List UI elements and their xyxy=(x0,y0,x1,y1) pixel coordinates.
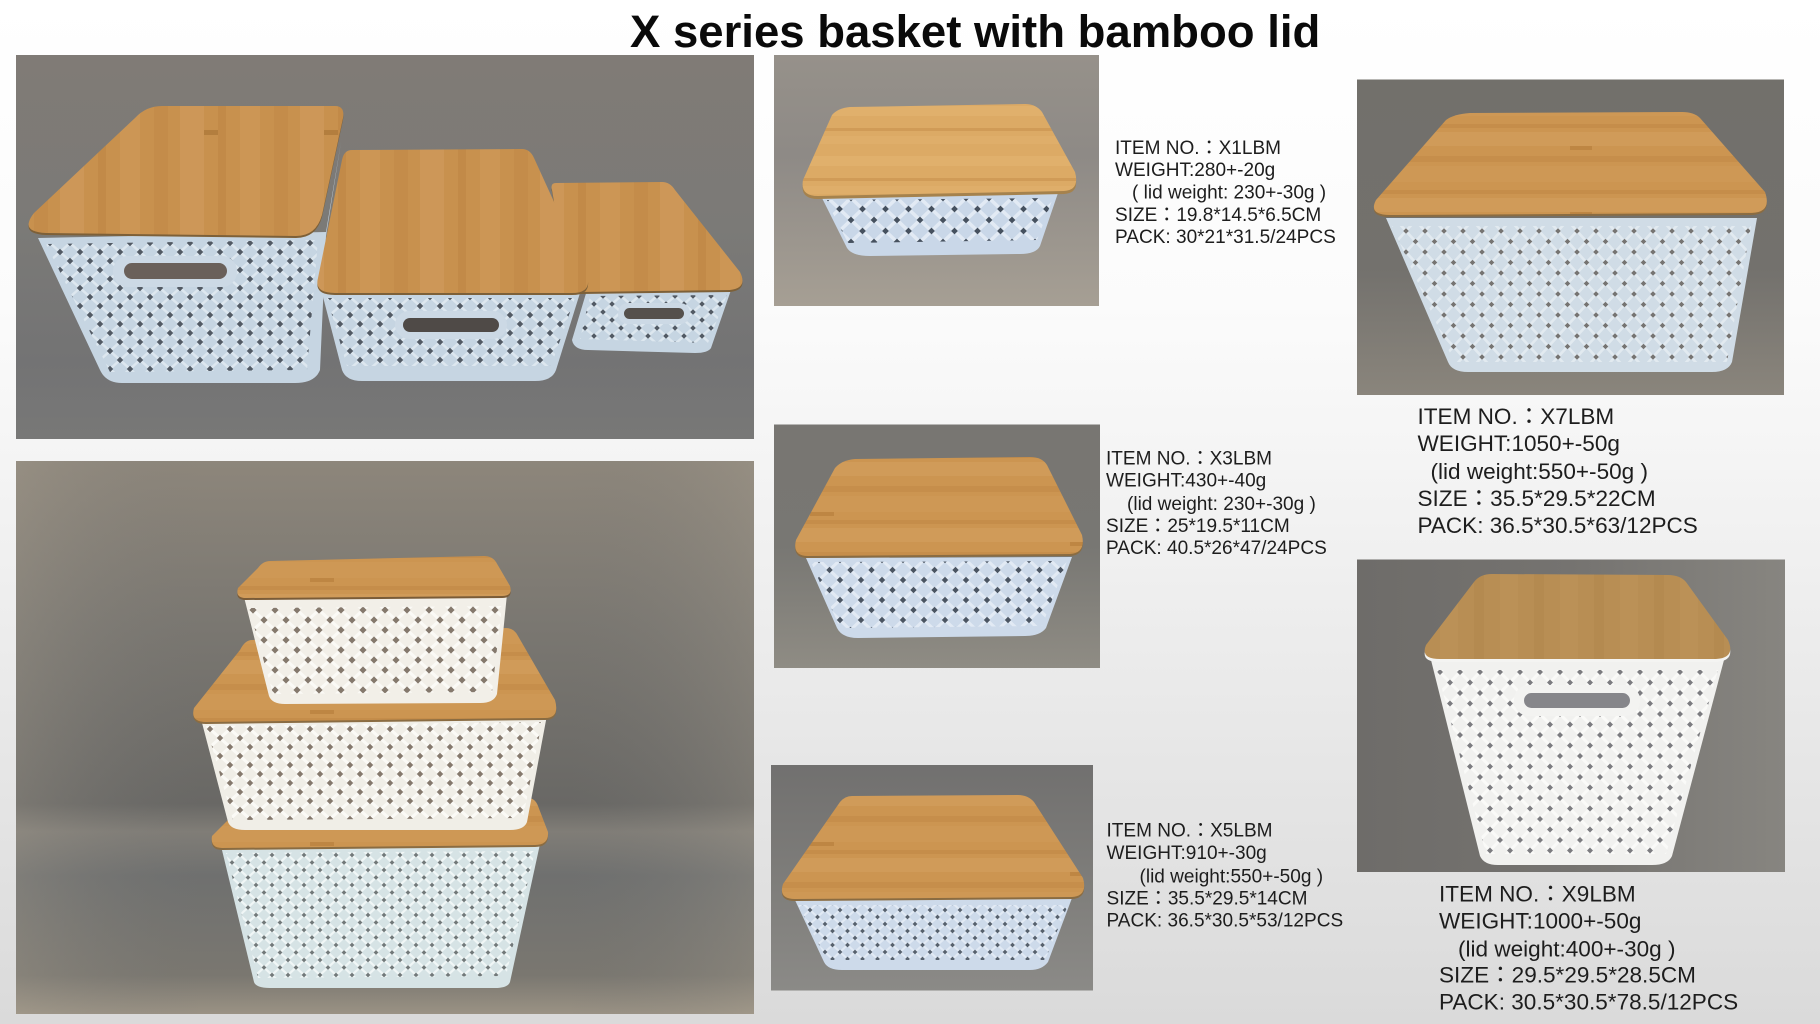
photo: X3LBM basket xyxy=(774,424,1100,668)
spec text: X9LBM: WEIGHT:1000+-50g xyxy=(1439,908,1641,934)
spec text: X3LBM: WEIGHT:430+-40g xyxy=(1106,470,1266,492)
spec text: X9LBM: SIZE：29.5*29.5*28.5CM xyxy=(1439,962,1696,988)
spec text: X7LBM xyxy=(1418,404,1698,538)
spec text: X7LBM: PACK: 36.5*30.5*63/12PCS xyxy=(1418,513,1698,538)
spec text: X9LBM: (lid weight:400+-30g ) xyxy=(1458,936,1675,962)
spec text: X5LBM: WEIGHT:910+-30g xyxy=(1106,843,1267,864)
photo: X5LBM basket xyxy=(771,765,1093,990)
spec text: X1LBM xyxy=(1115,138,1336,248)
spec text: X7LBM: ITEM NO.：X7LBM xyxy=(1418,404,1614,429)
spec text: X5LBM xyxy=(1106,820,1343,932)
spec text: X7LBM: WEIGHT:1050+-50g xyxy=(1418,431,1620,456)
spec text: X1LBM: PACK: 30*21*31.5/24PCS xyxy=(1115,227,1336,248)
spec text: X5LBM: PACK: 36.5*30.5*53/12PCS xyxy=(1106,910,1343,932)
spec text: X7LBM: (lid weight:550+-50g ) xyxy=(1430,459,1648,484)
photo: X9LBM basket xyxy=(1357,560,1785,872)
bottom stacked basket xyxy=(212,798,548,988)
spec text: X1LBM: ( lid weight: 230+-30g ) xyxy=(1132,182,1326,204)
middle stacked basket xyxy=(193,628,556,830)
title: X series basket with bamboo lid xyxy=(630,6,1320,57)
spec text: X1LBM: WEIGHT:280+-20g xyxy=(1115,160,1275,181)
spec text: X9LBM: PACK: 30.5*30.5*78.5/12PCS xyxy=(1439,990,1738,1014)
spec text: X3LBM: (lid weight: 230+-30g ) xyxy=(1127,494,1316,515)
small basket xyxy=(552,182,742,353)
spec text: X9LBM xyxy=(1439,882,1738,1014)
photo: three baskets side by side xyxy=(16,55,754,439)
photo: X1LBM basket xyxy=(774,55,1099,306)
top stacked basket xyxy=(237,556,511,704)
spec text: X3LBM: ITEM NO.：X3LBM xyxy=(1106,448,1272,470)
spec text: X5LBM: (lid weight:550+-50g ) xyxy=(1140,866,1323,888)
spec text: X5LBM: SIZE：35.5*29.5*14CM xyxy=(1106,888,1308,910)
spec text: X3LBM: SIZE：25*19.5*11CM xyxy=(1106,516,1290,537)
spec text: X3LBM: PACK: 40.5*26*47/24PCS xyxy=(1106,538,1327,559)
large basket xyxy=(29,106,343,383)
spec text: X7LBM: SIZE：35.5*29.5*22CM xyxy=(1418,486,1656,511)
spec text: X9LBM: ITEM NO.：X9LBM xyxy=(1439,882,1636,906)
spec text: X1LBM: ITEM NO.：X1LBM xyxy=(1115,138,1281,159)
medium basket xyxy=(317,149,588,381)
spec text: X5LBM: ITEM NO.：X5LBM xyxy=(1106,820,1273,842)
spec text: X1LBM: SIZE：19.8*14.5*6.5CM xyxy=(1115,205,1321,226)
spec text: X3LBM xyxy=(1106,448,1327,559)
photo: X7LBM basket xyxy=(1357,80,1784,395)
photo: three baskets stacked xyxy=(16,461,754,1014)
